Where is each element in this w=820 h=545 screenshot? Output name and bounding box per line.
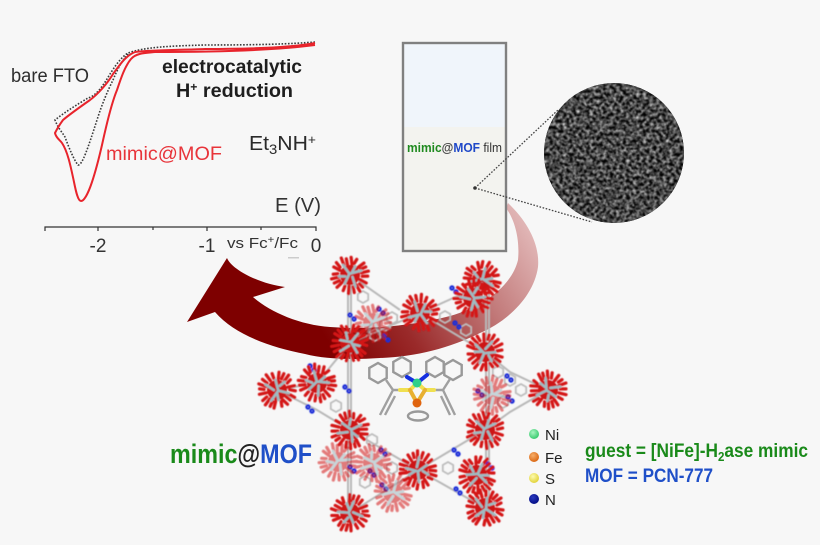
zoom dotted lines: [473, 110, 592, 222]
axis note: vs Fc: [227, 235, 263, 252]
x axis: [45, 227, 316, 231]
Fe atom: [412, 398, 422, 408]
guest caption: guest = [NiFe]-H: [585, 440, 735, 462]
curve: mimic@MOF red: [55, 43, 315, 201]
label: mimic@MOF: mimic@MOF: [106, 143, 222, 165]
label: H+ reduction: +: [190, 80, 197, 94]
axis title: E (V): [275, 195, 321, 217]
MOF crystal structure: [254, 253, 573, 538]
Ni atom: [412, 378, 422, 388]
cyclic voltammogram chart: [11, 42, 321, 257]
label: Et3NH+: 3: [269, 141, 278, 157]
slide film area: [403, 127, 506, 251]
slide frame: [403, 43, 506, 251]
tick label 0: 0: [311, 236, 321, 257]
axis note: /Fc: [274, 235, 299, 252]
film label: mimic@MOF film: [407, 141, 502, 155]
label: bare FTO: bare FTO: [11, 66, 89, 87]
slide upper glass: [403, 43, 506, 128]
legend: N: N: [545, 492, 556, 509]
SEM micrograph circle: [544, 83, 684, 223]
legend: Ni: Ni: [545, 427, 559, 444]
label: Et3NH+: Et: [249, 133, 268, 155]
guest molecule: [369, 357, 462, 420]
curve: bare FTO dotted: [55, 42, 315, 165]
label: electrocatalytic: electrocatalytic: [162, 56, 302, 78]
guest caption: 2: [718, 449, 724, 464]
axis note: +: [268, 235, 275, 246]
FTO slide with film: [403, 43, 506, 251]
MOF caption: MOF = PCN-777: [585, 465, 713, 487]
label: Et3NH+: +: [308, 132, 316, 147]
guest caption: ase mimic: [724, 440, 808, 462]
linker nitrogen atoms: [306, 286, 514, 495]
metal clusters: [254, 253, 573, 538]
metal core bonds: [400, 375, 434, 403]
pale background clusters: [313, 302, 517, 516]
ligand bonds: [380, 379, 455, 415]
label: H+ reduction: reduction: [197, 80, 293, 102]
label: H+ reduction: H: [176, 80, 190, 102]
legend: S: S: [545, 471, 555, 488]
linker phenyl rings: [331, 291, 526, 488]
tick label -1: -1: [199, 236, 215, 257]
curved arrow: [187, 203, 538, 359]
legend: Fe: Fe: [545, 450, 563, 467]
title: mimic@MOF: mimic@MOF: [170, 439, 312, 469]
atom legend: [529, 427, 563, 509]
label: Et3NH+: NH: [277, 133, 308, 155]
small mark below axis: [288, 257, 299, 258]
tick label -2: -2: [90, 236, 106, 257]
phenyl rings: [369, 357, 462, 420]
framework struts: [277, 275, 548, 513]
